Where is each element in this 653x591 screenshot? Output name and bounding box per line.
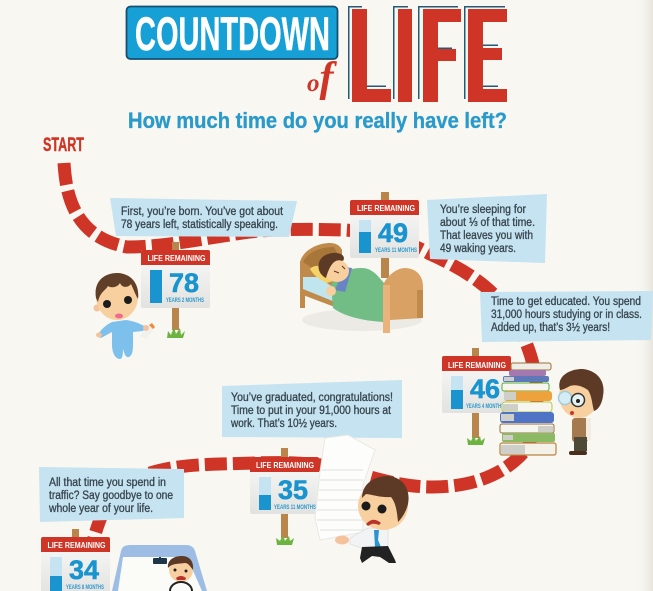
callout: work: You’ve graduated, congratulations!	[231, 392, 393, 404]
title: countdown badge	[126, 6, 338, 60]
title: LIFE	[348, 6, 507, 102]
sign: 49 years	[350, 192, 419, 278]
sign: 46 years: 46	[470, 374, 500, 404]
callout: work	[222, 380, 402, 438]
callout: traffic: All that time you spend in	[49, 477, 166, 489]
title: countdown badge: COUNTDOWN	[135, 7, 330, 60]
sign: 78 years: YEARS 2 MONTHS	[166, 298, 204, 304]
dashed life path	[64, 163, 537, 545]
sign: 78 years: 78	[169, 268, 199, 298]
callout: born	[110, 198, 297, 237]
icon: sleeping person in bed	[300, 243, 423, 333]
sign: 49 years: YEARS 11 MONTHS	[375, 248, 417, 254]
sign: 34 years: 34	[69, 555, 99, 585]
sign: 35 years	[250, 448, 319, 545]
icon: book stack	[500, 363, 556, 455]
sign: 34 years: LIFE REMAINING	[48, 541, 106, 550]
callout: education	[480, 291, 653, 342]
icon: office worker carrying paper	[315, 435, 409, 563]
sign: 46 years: LIFE REMAINING	[448, 361, 506, 370]
callout: work: Time to put in your 91,000 hours at	[231, 405, 392, 417]
callout: sleeping: 49 waking years.	[440, 243, 516, 255]
subtitle: How much time do you really have left?	[128, 108, 507, 133]
sign: 34 years: YEARS 8 MONTHS	[66, 585, 104, 591]
icon: driver in car	[112, 545, 207, 591]
sign: 35 years: LIFE REMAINING	[256, 461, 314, 470]
sign: 49 years: 49	[378, 218, 408, 248]
sign: 49 years: LIFE REMAINING	[357, 204, 415, 213]
sign: 35 years: 35	[278, 475, 308, 505]
sign: 35 years: YEARS 11 MONTHS	[274, 505, 316, 511]
callout: sleeping: That leaves you with	[440, 230, 533, 242]
callout: traffic	[39, 467, 184, 522]
sign: 46 years: YEARS 4 MONTHS	[466, 404, 504, 410]
callout: education: Added up, that’s 3½ years!	[491, 322, 610, 334]
sign: 78 years: LIFE REMAINING	[148, 254, 206, 263]
icon: baby	[94, 273, 155, 359]
callout: work: work. That’s 10½ years.	[230, 418, 337, 430]
title: of: of	[307, 55, 338, 101]
callout: born: 78 years left, statistically speaking.	[121, 219, 278, 231]
sign: 34 years	[41, 529, 110, 591]
sign: 78 years	[141, 242, 210, 338]
callout: traffic: traffic? Say goodbye to one	[49, 490, 173, 502]
icon: student with glasses	[558, 369, 604, 455]
start label: START	[43, 135, 84, 156]
callout: born: First, you’re born. You’ve got about	[121, 206, 284, 218]
callout: sleeping: about ⅓ of that time.	[440, 217, 535, 229]
callout: sleeping	[427, 194, 547, 263]
sign: 46 years	[442, 348, 511, 445]
callout: traffic: whole year of your life.	[48, 503, 153, 515]
callout: sleeping: You’re sleeping for	[440, 204, 526, 216]
